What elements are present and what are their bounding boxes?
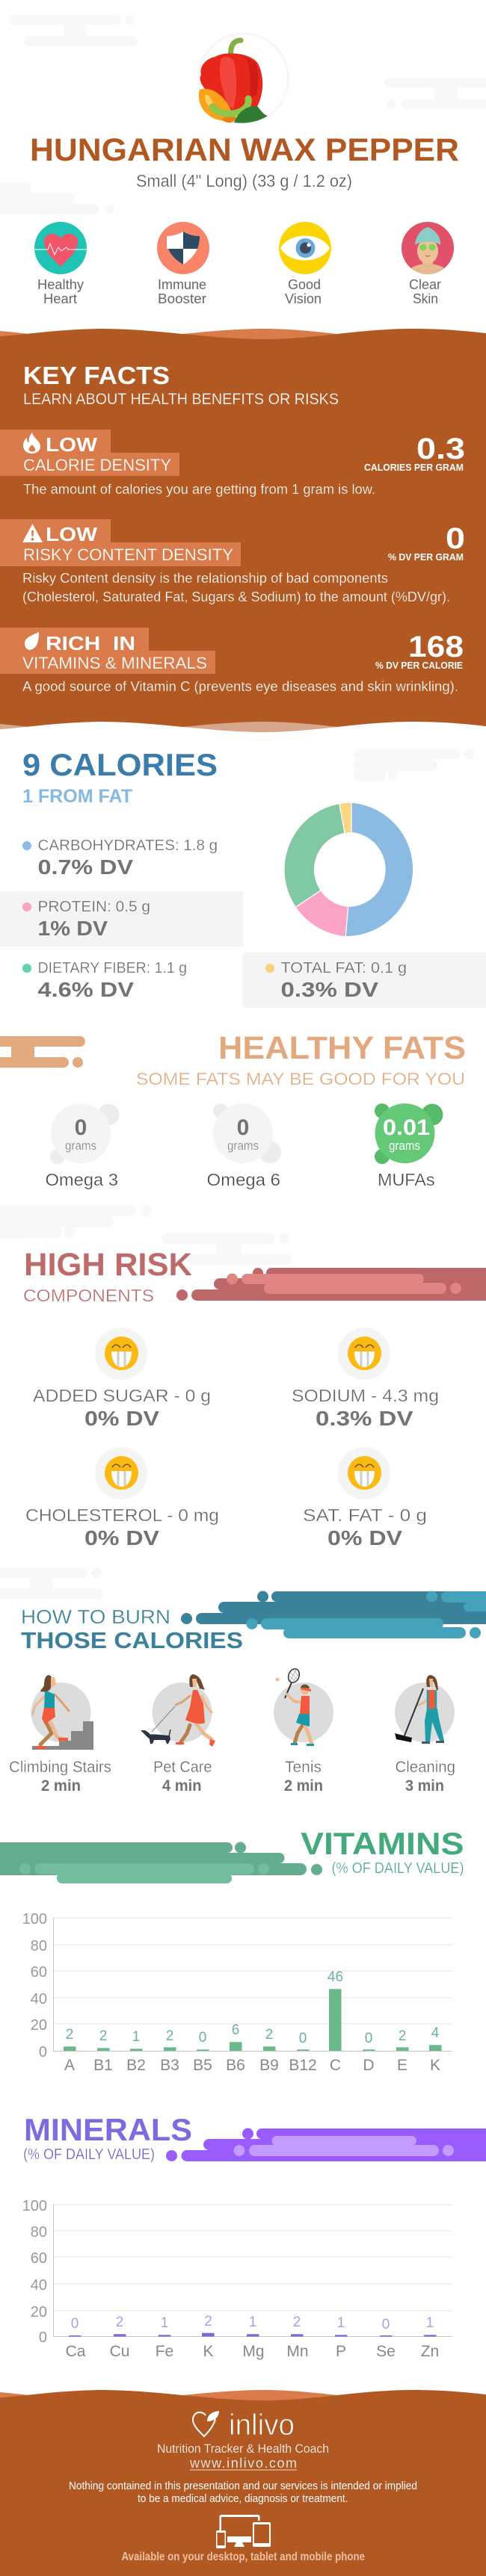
activity: climbing stairs: Climbing Stairs [9, 1759, 111, 1776]
fat: omega 6: grams [227, 1139, 259, 1153]
healthy fats heading [136, 1030, 466, 1089]
bar chart: minerals: Mn [286, 2343, 309, 2360]
fact: rich in vitamins and minerals: 168 [408, 631, 464, 663]
donut chart [284, 802, 413, 937]
risk: saturated fat: SAT. FAT - 0 g [303, 1505, 427, 1525]
bar chart: minerals: Fe [156, 2343, 173, 2360]
fact: low calorie density: The amount of calories you are getting from 1 gram is low. [23, 482, 375, 497]
bar chart: vitamins: 0 [365, 2031, 372, 2046]
benefit: clear skin: Clear [409, 277, 441, 292]
bar chart: vitamins: 1 [132, 2029, 140, 2045]
risk: cholesterol: 0% DV [84, 1526, 159, 1549]
bar chart: minerals: Cu [110, 2343, 129, 2360]
bar chart: minerals: 1 [249, 2315, 256, 2330]
burn heading: THOSE CALORIES [21, 1627, 243, 1653]
icon: grinning face [105, 1337, 138, 1370]
bar chart: vitamins: D [363, 2057, 375, 2074]
benefit: clear skin: Skin [413, 291, 438, 306]
icon: warning triangle [22, 524, 43, 542]
bar chart: minerals: 1 [161, 2315, 168, 2331]
legend: carbohydrates: 0.7% DV [37, 855, 133, 879]
fact: low calorie density: CALORIE DENSITY [23, 456, 171, 474]
footer tagline: www.inlivo.com [189, 2456, 297, 2471]
healthy fats heading: SOME FATS MAY BE GOOD FOR YOU [136, 1069, 465, 1089]
key facts heading: KEY FACTS [23, 362, 170, 389]
burn heading [21, 1606, 243, 1653]
fat: omega 6: 0 [237, 1115, 249, 1140]
bar chart: vitamins: 2 [166, 2028, 173, 2044]
bar chart: minerals: 20 [31, 2304, 47, 2320]
bar chart: vitamins: K [430, 2057, 440, 2074]
legend: carbohydrates: CARBOHYDRATES: 1.8 g [37, 837, 218, 854]
bar chart: vitamins: 2 [265, 2027, 273, 2043]
burn heading: HOW TO BURN [21, 1606, 170, 1628]
healthy fats heading: HEALTHY FATS [218, 1030, 466, 1066]
icon: devices: Available on your desktop, tablet and mobile phone [121, 2551, 365, 2563]
calories heading [22, 747, 218, 807]
activity: tennis: 2 min [284, 1777, 323, 1795]
benefit: good vision: Good [288, 277, 321, 292]
activity: tennis [274, 1668, 333, 1795]
fat: omega 3: grams [65, 1139, 96, 1153]
fat: omega 3: 0 [75, 1115, 87, 1140]
legend: total fat [265, 960, 407, 1001]
disclaimer: Nothing contained in this presentation and our services is intended or implied [69, 2480, 417, 2492]
bar chart: vitamins: 46 [327, 1969, 343, 1985]
bar chart: vitamins: B12 [289, 2057, 317, 2074]
bar chart: minerals: 0 [71, 2316, 79, 2332]
fact: low calorie density: 0.3 [416, 433, 465, 465]
bar chart: minerals: 1 [426, 2315, 434, 2331]
bar chart: minerals: 80 [31, 2224, 47, 2241]
bar chart: minerals: 2 [116, 2315, 123, 2330]
minerals heading: MINERALS [24, 2112, 192, 2147]
activity: cleaning: Cleaning [395, 1759, 455, 1776]
fact: low risky content density: % DV PER GRAM [388, 551, 464, 563]
legend: protein [22, 899, 150, 940]
bar chart: vitamins: 2 [99, 2028, 107, 2044]
fact: rich in vitamins and minerals [0, 628, 464, 694]
legend: dietary fiber [22, 960, 187, 1001]
bar chart: vitamins: B5 [193, 2057, 212, 2074]
icon: devices [121, 2515, 365, 2563]
activity: pet care [141, 1674, 215, 1795]
risk: added sugar [33, 1328, 211, 1430]
fat: omega 6 [206, 1103, 281, 1189]
risk: sodium: SODIUM - 4.3 mg [292, 1386, 439, 1405]
bar chart: vitamins: 80 [31, 1938, 47, 1954]
risk: sodium [292, 1328, 439, 1430]
bar chart: vitamins: 4 [431, 2025, 440, 2041]
vitamins heading: (% OF DAILY VALUE) [332, 1860, 464, 1877]
activity: climbing stairs: 2 min [41, 1777, 81, 1795]
fact: low calorie density: CALORIES PER GRAM [364, 462, 464, 473]
bar chart: vitamins: B6 [226, 2057, 245, 2074]
risk: added sugar: 0% DV [84, 1407, 159, 1430]
bar chart: vitamins: 20 [31, 2017, 47, 2034]
activity: tennis: Tenis [285, 1759, 322, 1776]
bar chart: vitamins: 2 [66, 2027, 73, 2043]
fact: rich in vitamins and minerals: RICH IN [46, 632, 135, 654]
minerals heading: (% OF DAILY VALUE) [23, 2146, 155, 2163]
legend: protein: 1% DV [37, 917, 108, 940]
fat: omega 3: Omega 3 [45, 1170, 118, 1189]
legend: total fat: 0.3% DV [281, 978, 378, 1001]
icon: flame [23, 433, 40, 453]
benefit: good vision [279, 222, 331, 306]
legend: protein: PROTEIN: 0.5 g [37, 899, 150, 915]
icon: grinning face [105, 1456, 138, 1490]
high risk heading [23, 1247, 192, 1305]
bar chart: vitamins [22, 1911, 452, 2074]
fact: low risky content density: Risky Content density is the relationship of bad components [22, 571, 388, 586]
high risk heading: HIGH RISK [24, 1247, 192, 1283]
benefit: clear skin [402, 222, 454, 306]
bar chart: vitamins: 40 [31, 1991, 47, 2007]
bar chart: minerals: Mg [242, 2343, 265, 2360]
activity: pet care: Pet Care [153, 1759, 212, 1776]
fact: low risky content density: LOW [46, 523, 98, 545]
healthy fats decoration [0, 1036, 85, 1068]
bar chart: vitamins: 0 [199, 2030, 206, 2046]
bar chart: minerals: Se [376, 2343, 396, 2360]
header background clouds [0, 15, 486, 214]
risk: saturated fat [303, 1447, 427, 1549]
icon: grinning face [348, 1337, 381, 1370]
legend: carbohydrates [22, 837, 218, 879]
risk: added sugar: ADDED SUGAR - 0 g [33, 1386, 211, 1405]
logo: inlivo: inlivo [229, 2409, 295, 2442]
high risk clouds [0, 1205, 292, 1265]
disclaimer [69, 2480, 417, 2505]
fat: omega 6: Omega 6 [206, 1170, 280, 1189]
fat: MUFAs: grams [389, 1139, 420, 1153]
logo: inlivo [193, 2409, 295, 2442]
benefit: healthy heart: Healthy [37, 277, 84, 292]
high risk decoration [176, 1268, 486, 1301]
bar chart: minerals: Ca [66, 2343, 86, 2360]
risk: cholesterol [25, 1447, 219, 1549]
calories clouds [354, 749, 474, 781]
benefit: immune booster: Booster [158, 291, 206, 306]
benefit: immune booster [157, 222, 209, 306]
fat: MUFAs [375, 1103, 443, 1189]
fact: rich in vitamins and minerals: A good source of Vitamin C (prevents eye diseases and skin wrinkling). [22, 679, 458, 694]
minerals heading [23, 2112, 192, 2163]
bar chart: vitamins: B1 [93, 2057, 113, 2074]
bar chart: vitamins: 100 [22, 1911, 47, 1928]
bar chart: minerals: K [203, 2343, 214, 2360]
activity: pet care: 4 min [162, 1777, 202, 1795]
icon: grinning face [348, 1456, 381, 1490]
benefit: good vision: Vision [285, 291, 322, 306]
serving size subtitle: Small (4" Long) (33 g / 1.2 oz) [136, 171, 352, 191]
burn clouds [0, 1567, 103, 1599]
benefit: healthy heart [34, 222, 87, 306]
bar chart: vitamins: 2 [399, 2028, 406, 2044]
bar chart: vitamins: B2 [126, 2057, 146, 2074]
bar chart: minerals [22, 2198, 452, 2360]
benefit: immune booster: Immune [158, 277, 206, 292]
fact: low risky content density: 0 [446, 522, 465, 555]
fat: MUFAs: 0.01 [383, 1115, 430, 1140]
bar chart: minerals: P [336, 2343, 346, 2360]
panel: footer [0, 2390, 486, 2576]
burn decoration [181, 1591, 486, 1638]
bar chart: vitamins: C [330, 2057, 341, 2074]
bar chart: vitamins: B3 [160, 2057, 179, 2074]
fact: low risky content density: RISKY CONTENT DENSITY [23, 545, 233, 564]
bar chart: minerals: 2 [293, 2315, 301, 2330]
benefit: healthy heart: Heart [43, 291, 77, 306]
vitamins decoration [0, 1842, 322, 1883]
fat: omega 3 [45, 1103, 120, 1189]
bar chart: minerals: 100 [22, 2198, 47, 2214]
risk: cholesterol: CHOLESTEROL - 0 mg [25, 1505, 219, 1525]
activity: climbing stairs [9, 1675, 111, 1795]
activity: cleaning: 3 min [405, 1777, 444, 1795]
minerals decoration [166, 2128, 486, 2161]
legend: dietary fiber: 4.6% DV [37, 978, 134, 1001]
fact: low risky content density [0, 519, 465, 604]
risk: saturated fat: 0% DV [327, 1526, 402, 1549]
bar chart: vitamins: 60 [31, 1964, 47, 1981]
activity: cleaning [395, 1675, 455, 1795]
vitamins heading: VITAMINS [301, 1826, 464, 1861]
bar chart: minerals: 40 [31, 2277, 47, 2294]
risk: sodium: 0.3% DV [316, 1407, 413, 1430]
bar chart: vitamins: 0 [299, 2031, 307, 2046]
footer tagline [157, 2442, 329, 2471]
legend: dietary fiber: DIETARY FIBER: 1.1 g [37, 960, 187, 976]
fact: low calorie density: LOW [46, 433, 98, 456]
bar chart: minerals: Zn [421, 2343, 439, 2360]
panel: macronutrient legend [0, 837, 486, 1008]
vitamins heading [301, 1826, 464, 1877]
fact: rich in vitamins and minerals: VITAMINS & MINERALS [22, 654, 207, 672]
hero pepper image [199, 34, 289, 123]
fat: MUFAs: MUFAs [378, 1170, 435, 1189]
fact: rich in vitamins and minerals: % DV PER CALORIE [375, 660, 463, 671]
icon: leaf [25, 632, 39, 650]
bar chart: vitamins: B9 [259, 2057, 279, 2074]
bar chart: vitamins: 0 [39, 2044, 47, 2061]
legend: total fat: TOTAL FAT: 0.1 g [281, 960, 407, 976]
fact: low risky content density: (Cholesterol, Saturated Fat, Sugars & Sodium) to the amount (%DV/gr). [22, 589, 450, 604]
bar chart: minerals: 1 [337, 2315, 345, 2331]
key facts heading: LEARN ABOUT HEALTH BENEFITS OR RISKS [23, 391, 339, 408]
bar chart: minerals: 2 [204, 2314, 212, 2329]
bar chart: vitamins: A [64, 2057, 75, 2074]
bar chart: minerals: 60 [31, 2250, 47, 2267]
title: HUNGARIAN WAX PEPPER [30, 132, 459, 168]
panel: key facts [0, 329, 486, 740]
bar chart: vitamins: E [397, 2057, 407, 2074]
bar chart: minerals: 0 [382, 2317, 390, 2332]
bar chart: vitamins: 6 [232, 2022, 239, 2038]
disclaimer: to be a medical advice, diagnosis or treatment. [138, 2492, 348, 2505]
calories heading: 1 FROM FAT [22, 786, 132, 807]
footer tagline: Nutrition Tracker & Health Coach [157, 2442, 329, 2456]
calories heading: 9 CALORIES [22, 747, 218, 782]
high risk heading: COMPONENTS [23, 1286, 154, 1305]
key facts heading [23, 362, 339, 408]
bar chart: minerals: 0 [39, 2329, 47, 2346]
fact: low calorie density [0, 430, 465, 497]
